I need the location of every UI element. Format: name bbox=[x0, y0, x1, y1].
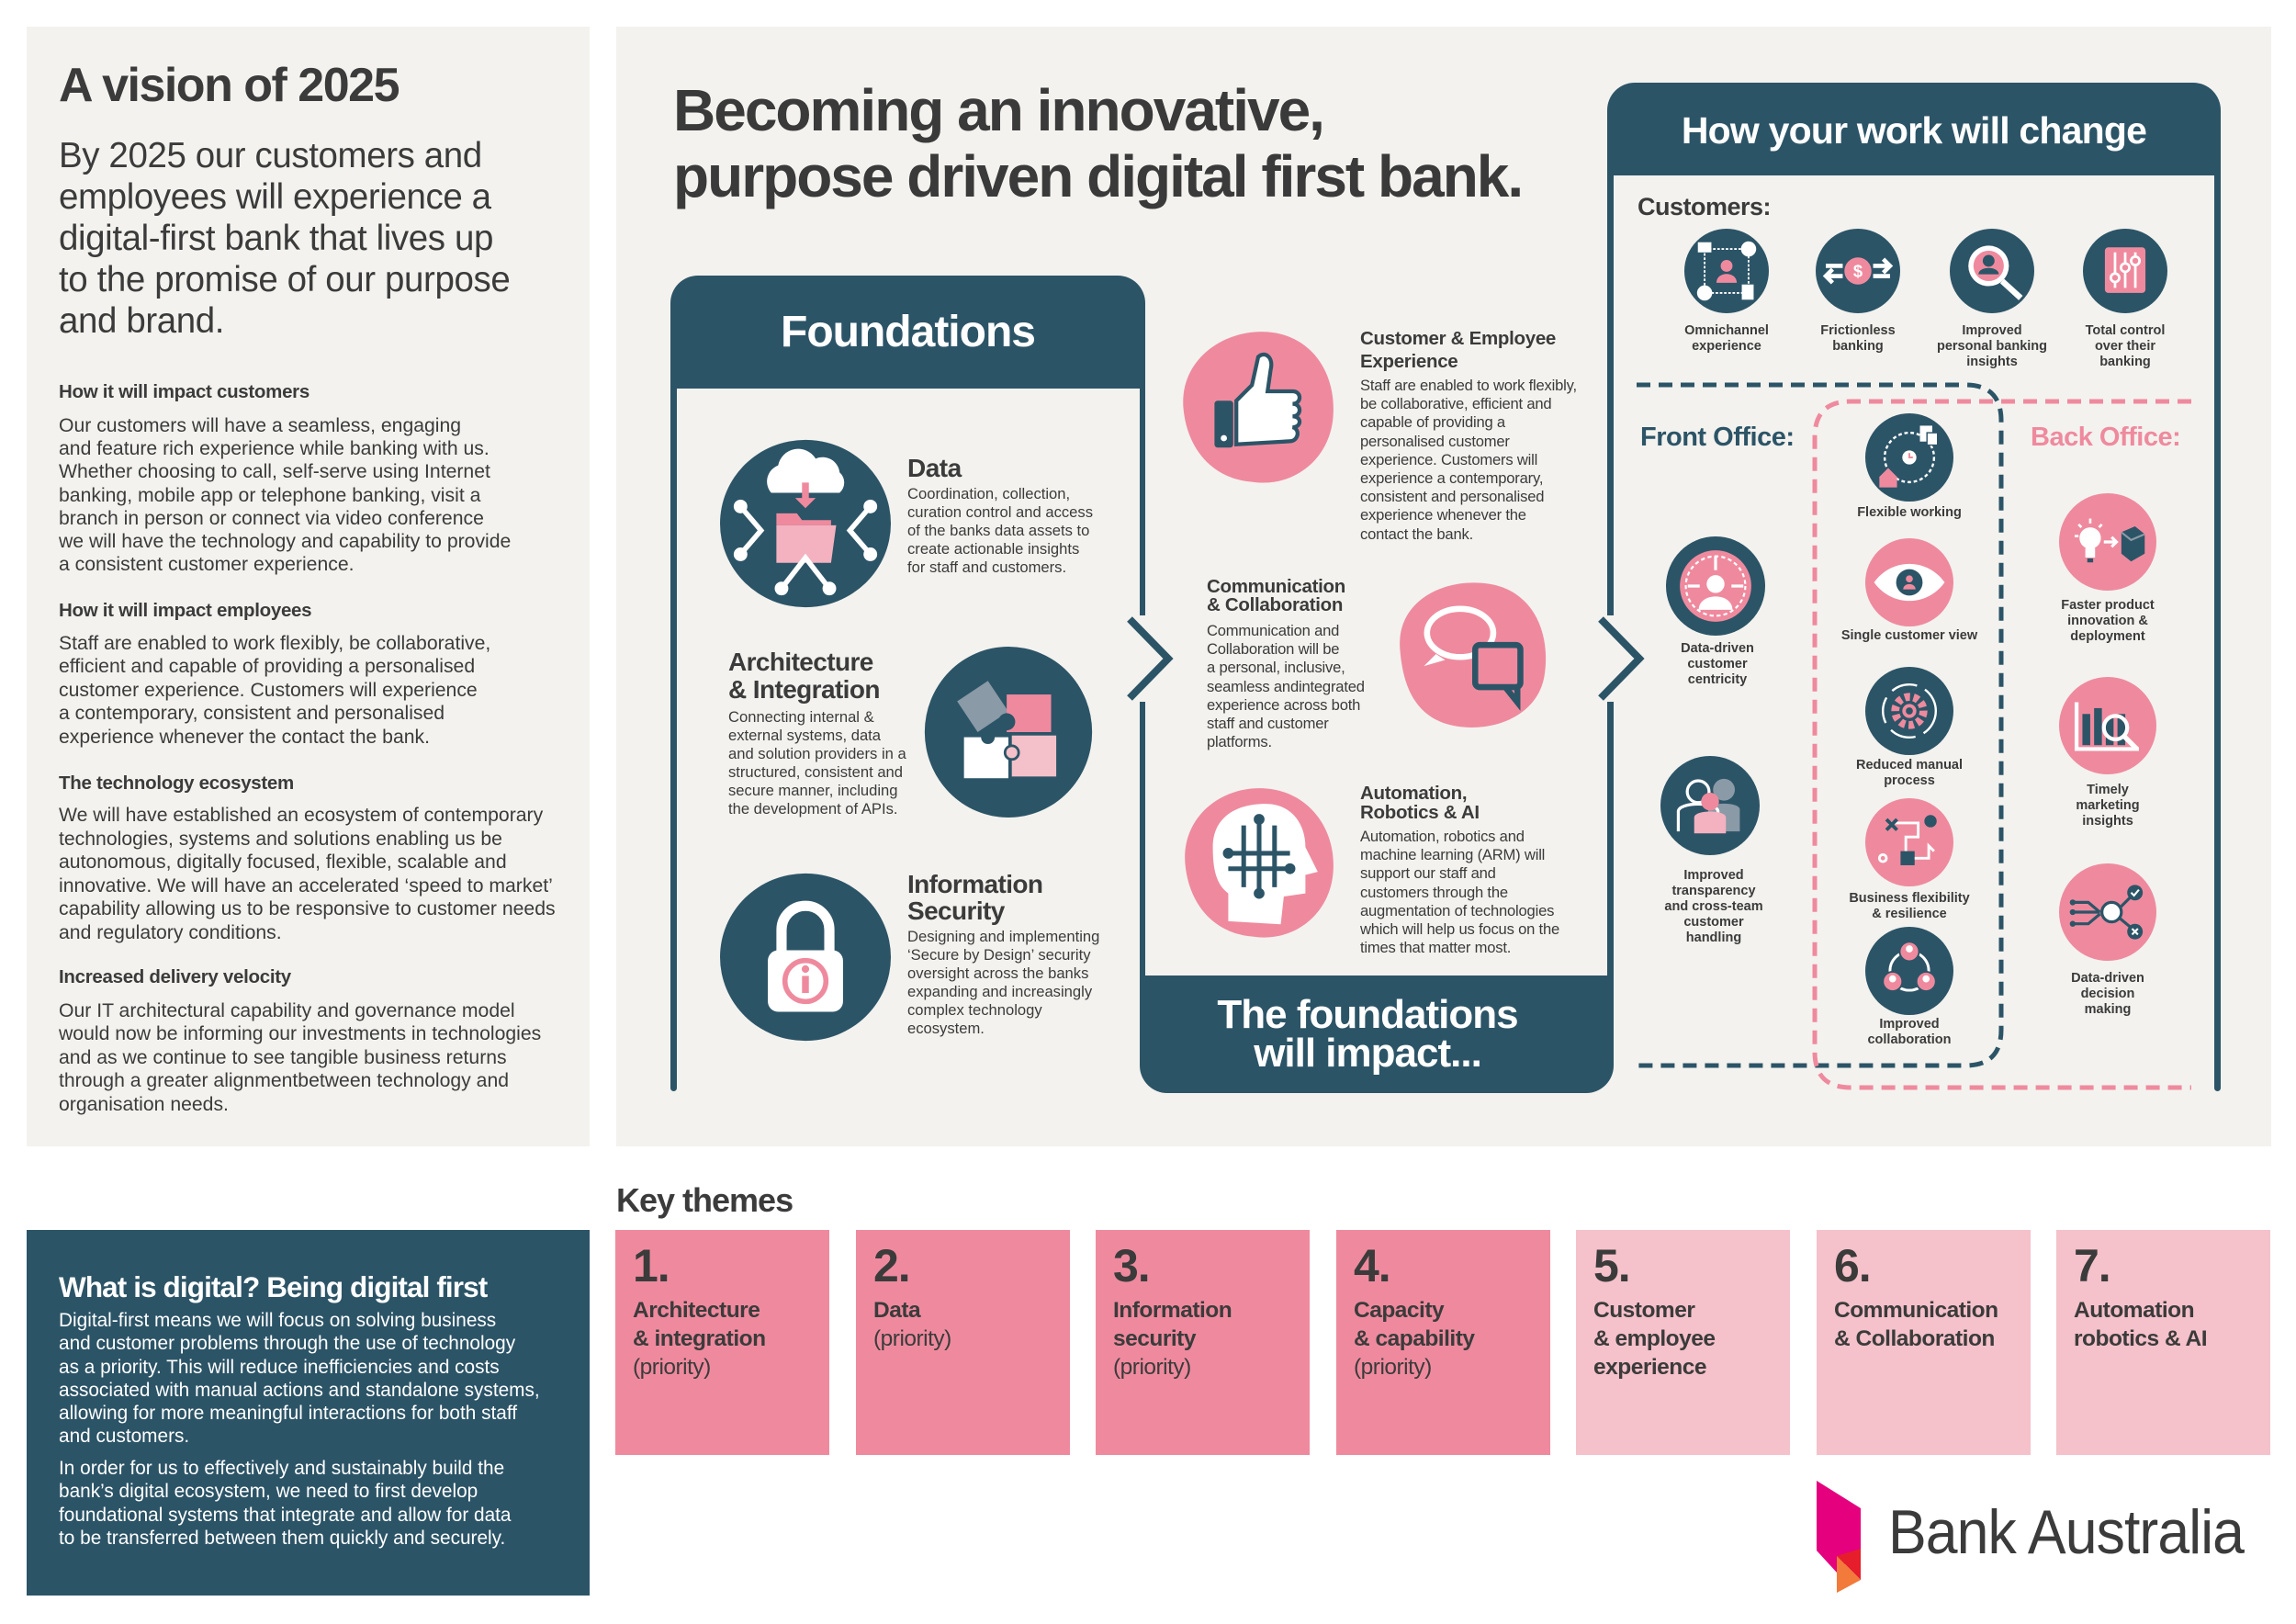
text: automation robotics & AI: augmentation of technologies bbox=[1360, 902, 1554, 919]
text: automation robotics & AI: Automation, robotics and bbox=[1360, 828, 1525, 845]
text: building ecosystem: foundational systems that integrate and allow for data bbox=[59, 1505, 511, 1526]
theme 5: & employee bbox=[1593, 1326, 1716, 1351]
heading: employees: How it will impact employees bbox=[59, 600, 311, 621]
label: improved personal banking insights bbox=[1937, 323, 2047, 369]
middle column right border bbox=[1607, 173, 1614, 977]
foundations header: Foundations bbox=[781, 308, 1035, 356]
text: delivery velocity: and as we continue to see tangible business returns bbox=[59, 1047, 507, 1068]
theme 3: security bbox=[1113, 1326, 1196, 1351]
text: customer & employee experience: contact the bank. bbox=[1360, 525, 1473, 543]
icon: AI head bbox=[1185, 788, 1334, 938]
theme 2 bbox=[856, 1230, 1070, 1455]
intro paragraph: to the promise of our purpose bbox=[59, 260, 510, 299]
text: customer & employee experience: experience whenever the bbox=[1360, 506, 1526, 524]
theme 7: robotics & AI bbox=[2074, 1326, 2207, 1351]
label: timely marketing insights: insights bbox=[2082, 814, 2133, 829]
theme 6 bbox=[1817, 1230, 2031, 1455]
label: frictionless banking: banking bbox=[1832, 339, 1884, 354]
theme 7 bbox=[2056, 1230, 2270, 1455]
label: improved transparency: handling bbox=[1686, 930, 1741, 945]
text: technology ecosystem: autonomous, digitally focused, flexible, scalable and bbox=[59, 851, 507, 873]
icon: speech bubbles bbox=[1400, 582, 1547, 727]
panel: vision of 2025 bbox=[27, 27, 590, 1146]
label: reduced manual process bbox=[1856, 758, 1963, 788]
label: reduced manual process: process bbox=[1884, 773, 1935, 788]
text: automation robotics & AI: Robotics & AI bbox=[1360, 802, 1480, 823]
icon: thumbs up bbox=[1183, 332, 1334, 483]
text: employees: efficient and capable of providing a personalised bbox=[59, 656, 475, 677]
text: technology ecosystem: technologies, systems and solutions enabling us be bbox=[59, 829, 502, 849]
text: architecture & integration: Architecture bbox=[728, 648, 873, 676]
text: technology ecosystem: We will have established an ecosystem of contemporary bbox=[59, 805, 543, 826]
theme 1 bbox=[615, 1230, 829, 1455]
text: automation robotics & AI: Automation, bbox=[1360, 783, 1467, 804]
text: architecture & integration: & Integration bbox=[728, 675, 880, 704]
theme 3: (priority) bbox=[1113, 1355, 1191, 1380]
theme 4: (priority) bbox=[1354, 1355, 1432, 1380]
label: data-driven customer centricity bbox=[1681, 641, 1754, 687]
text: customer & employee experience: consistent and personalised bbox=[1360, 488, 1544, 505]
text: automation robotics & AI: customers through the bbox=[1360, 884, 1508, 901]
label: total control over their banking: over their bbox=[2095, 339, 2155, 354]
text: customer & employee experience: experience a contemporary, bbox=[1360, 469, 1543, 487]
text: digital first explanation: and customer problems through the use of technology bbox=[59, 1333, 515, 1354]
text: architecture & integration bbox=[728, 648, 906, 818]
text: delivery velocity: through a greater alignmentbetween technology and bbox=[59, 1070, 509, 1091]
label: back office: Back Office: bbox=[2031, 423, 2180, 452]
text: building ecosystem: to be transferred between them quickly and securely. bbox=[59, 1528, 505, 1549]
text: technology ecosystem bbox=[59, 805, 556, 942]
icon: puzzle bbox=[924, 647, 1093, 818]
theme 1: Architecture bbox=[633, 1298, 760, 1323]
theme 2: (priority) bbox=[873, 1326, 951, 1351]
text: digital first explanation: as a priority. This will reduce inefficiencies and costs bbox=[59, 1357, 500, 1378]
text: data bbox=[907, 454, 1093, 576]
icon: frictionless banking bbox=[1816, 229, 1900, 313]
theme 5 bbox=[1576, 1230, 1790, 1455]
text: customers: Our customers will have a seamless, engaging bbox=[59, 415, 461, 436]
text: customers: Whether choosing to call, self-serve using Internet bbox=[59, 461, 490, 482]
text: automation robotics & AI: which will help us focus on the bbox=[1360, 920, 1559, 938]
text: delivery velocity: Our IT architectural capability and governance model bbox=[59, 1000, 515, 1021]
icon: data-driven decision making bbox=[2059, 863, 2156, 961]
icon: omnichannel bbox=[1684, 229, 1769, 313]
text: delivery velocity bbox=[59, 1000, 541, 1115]
text: customer & employee experience: personalised customer bbox=[1360, 433, 1510, 450]
label: improved collaboration: collaboration bbox=[1867, 1032, 1952, 1047]
label: customers: Customers: bbox=[1638, 193, 1771, 220]
theme 1: (priority) bbox=[633, 1355, 711, 1380]
label: faster product innovation: Faster product bbox=[2061, 598, 2155, 613]
logo: Bank Australia bbox=[1815, 1477, 2246, 1595]
text: information security: Designing and implementing bbox=[907, 928, 1099, 945]
label: timely marketing insights bbox=[2076, 783, 2140, 829]
callout: the foundations will impact bbox=[1140, 976, 1614, 1093]
text: information security bbox=[907, 870, 1099, 1037]
text: building ecosystem: In order for us to effectively and sustainably build the bbox=[59, 1458, 504, 1479]
intro paragraph: and brand. bbox=[59, 301, 224, 341]
label: improved transparency bbox=[1664, 868, 1763, 945]
main title bbox=[673, 77, 1522, 209]
text: employees: customer experience. Customers will experience bbox=[59, 680, 478, 701]
theme 3 bbox=[1096, 1230, 1310, 1455]
text: customers bbox=[59, 415, 511, 575]
theme 1: 1. bbox=[633, 1240, 670, 1291]
label: improved personal banking insights: personal banking bbox=[1937, 339, 2047, 354]
text: data: Data bbox=[907, 454, 962, 482]
icon: timely marketing insights bbox=[2059, 677, 2156, 774]
theme 4: & capability bbox=[1354, 1326, 1475, 1351]
text: customer & employee experience: Customer & Employee bbox=[1360, 328, 1556, 349]
text: data: Coordination, collection, bbox=[907, 485, 1070, 502]
text: customer & employee experience: Experience bbox=[1360, 351, 1458, 372]
label: timely marketing insights: Timely bbox=[2087, 783, 2129, 797]
label: faster product innovation bbox=[2061, 598, 2155, 645]
theme 5: 5. bbox=[1593, 1240, 1630, 1291]
panel: main diagram background bbox=[616, 27, 2271, 1146]
label: data-driven decision making: Data-driven bbox=[2071, 971, 2144, 986]
text: technology ecosystem: innovative. We will have an accelerated ‘speed to market’ bbox=[59, 874, 553, 897]
theme 3: 3. bbox=[1113, 1240, 1150, 1291]
theme 2: 2. bbox=[873, 1240, 910, 1291]
text: communication & collaboration bbox=[1207, 576, 1365, 750]
text: digital first explanation: associated with manual actions and standalone systems, bbox=[59, 1380, 540, 1401]
panel: what is digital bbox=[27, 1230, 590, 1596]
label: data-driven decision making bbox=[2071, 971, 2144, 1018]
text: technology ecosystem: capability allowing us to be responsive to customer needs bbox=[59, 898, 556, 919]
label: timely marketing insights: marketing bbox=[2076, 798, 2140, 813]
label: front office: Front Office: bbox=[1640, 423, 1795, 452]
text: delivery velocity: organisation needs. bbox=[59, 1094, 229, 1115]
text: data: of the banks data assets to bbox=[907, 522, 1089, 539]
callout: the foundations will impact: The foundations bbox=[1217, 992, 1518, 1037]
text: customer & employee experience bbox=[1360, 328, 1577, 543]
work change right border bbox=[2214, 173, 2221, 1091]
theme 2: Data bbox=[873, 1298, 920, 1323]
text: customers: banking, mobile app or telephone banking, visit a bbox=[59, 485, 480, 506]
text: information security: ‘Secure by Design’ security bbox=[907, 946, 1091, 964]
text: automation robotics & AI: times that matter most. bbox=[1360, 939, 1511, 956]
text: building ecosystem: bank’s digital ecosystem, we need to first develop bbox=[59, 1481, 478, 1502]
text: communication & collaboration: Collaboration will be bbox=[1207, 640, 1339, 658]
icon: data-driven customer centricity bbox=[1666, 536, 1765, 636]
label: business flexibility: Business flexibility bbox=[1849, 891, 1970, 906]
text: information security: expanding and increasingly bbox=[907, 983, 1092, 1000]
label: total control over their banking: Total control bbox=[2086, 323, 2165, 338]
label: single customer view: Single customer view bbox=[1841, 628, 1977, 643]
label: omnichannel experience: experience bbox=[1692, 339, 1761, 354]
text: digital first explanation: and customers. bbox=[59, 1426, 189, 1447]
label: data-driven customer centricity: Data-driven bbox=[1681, 641, 1754, 656]
theme 3: Information bbox=[1113, 1298, 1232, 1323]
label: flexible working: Flexible working bbox=[1857, 505, 1962, 520]
text: communication & collaboration: experience across both bbox=[1207, 696, 1360, 714]
label: improved collaboration bbox=[1867, 1017, 1952, 1048]
intro paragraph: By 2025 our customers and bbox=[59, 136, 482, 175]
label: faster product innovation: innovation & bbox=[2067, 614, 2148, 628]
text: architecture & integration: Connecting internal & bbox=[728, 708, 874, 726]
text: automation robotics & AI bbox=[1360, 783, 1559, 956]
text: digital first explanation: Digital-first means we will focus on solving business bbox=[59, 1310, 496, 1331]
label: business flexibility bbox=[1849, 891, 1970, 921]
label: data-driven customer centricity: customer bbox=[1687, 657, 1748, 671]
text: communication & collaboration: staff and customer bbox=[1207, 715, 1329, 732]
foundations header bbox=[670, 276, 1145, 389]
text: information security: Security bbox=[907, 897, 1005, 925]
text: information security: Information bbox=[907, 870, 1042, 898]
logo text: Bank Australia bbox=[1888, 1497, 2244, 1567]
theme 6: 6. bbox=[1834, 1240, 1871, 1291]
theme 4: Capacity bbox=[1354, 1298, 1444, 1323]
main title: purpose driven digital first bank. bbox=[673, 143, 1522, 209]
theme 7: Automation bbox=[2074, 1298, 2194, 1323]
label: improved transparency: and cross-team bbox=[1664, 899, 1763, 914]
arrow: chevron impacts to work change bbox=[1598, 615, 1644, 702]
text: information security: complex technology bbox=[907, 1001, 1042, 1019]
label: faster product innovation: deployment bbox=[2070, 629, 2145, 644]
text: customer & employee experience: experience. Customers will bbox=[1360, 451, 1537, 468]
label: improved transparency: Improved bbox=[1683, 868, 1744, 883]
heading: customers: How it will impact customers bbox=[59, 381, 310, 402]
foundations right border bbox=[1140, 386, 1145, 978]
text: employees: a contemporary, consistent and personalised bbox=[59, 703, 445, 724]
main title: Becoming an innovative, bbox=[673, 77, 1323, 143]
logo mark bbox=[1817, 1481, 1863, 1593]
heading: delivery velocity: Increased delivery velocity bbox=[59, 966, 291, 987]
heading: technology ecosystem: The technology ecosystem bbox=[59, 773, 294, 794]
label: data-driven decision making: decision bbox=[2081, 987, 2134, 1001]
text: digital first explanation bbox=[59, 1309, 540, 1449]
text: employees: Staff are enabled to work flexibly, be collaborative, bbox=[59, 633, 490, 654]
label: business flexibility: & resilience bbox=[1872, 907, 1947, 921]
text: automation robotics & AI: machine learning (ARM) will bbox=[1360, 846, 1545, 863]
intro paragraph bbox=[59, 136, 510, 341]
title: A vision of 2025: A vision of 2025 bbox=[59, 59, 399, 112]
theme 6: Communication bbox=[1834, 1298, 1998, 1323]
callout: the foundations will impact: will impact... bbox=[1254, 1031, 1481, 1076]
dashed office groupings bbox=[1637, 382, 2191, 1089]
intro paragraph: digital-first bank that lives up bbox=[59, 219, 493, 258]
label: total control over their banking bbox=[2085, 323, 2165, 369]
icon: personal banking insights bbox=[1950, 229, 2034, 313]
theme 7: 7. bbox=[2074, 1240, 2110, 1291]
label: improved collaboration: Improved bbox=[1879, 1017, 1940, 1032]
text: information security: ecosystem. bbox=[907, 1020, 985, 1037]
text: customer & employee experience: Staff are enabled to work flexibly, bbox=[1360, 377, 1577, 394]
label: reduced manual process: Reduced manual bbox=[1856, 758, 1963, 773]
icon: single customer view bbox=[1865, 538, 1953, 626]
theme 4: 4. bbox=[1354, 1240, 1390, 1291]
icon: improved transparency bbox=[1660, 756, 1760, 855]
heading: how your work will change: How your work will change bbox=[1682, 109, 2146, 152]
theme 6: & Collaboration bbox=[1834, 1326, 1995, 1351]
text: communication & collaboration: Communication bbox=[1207, 576, 1345, 597]
text: data: curation control and access bbox=[907, 503, 1093, 521]
text: data: create actionable insights bbox=[907, 540, 1079, 558]
heading: key themes: Key themes bbox=[616, 1181, 793, 1219]
text: communication & collaboration: a personal, inclusive, bbox=[1207, 659, 1345, 676]
text: customers: branch in person or connect via video conference bbox=[59, 508, 484, 529]
text: communication & collaboration: platforms. bbox=[1207, 733, 1272, 750]
label: total control over their banking: banking bbox=[2099, 355, 2151, 369]
theme 1: & integration bbox=[633, 1326, 766, 1351]
label: omnichannel experience: Omnichannel bbox=[1684, 323, 1769, 338]
theme 5: Customer bbox=[1593, 1298, 1694, 1323]
icon: improved collaboration bbox=[1865, 927, 1953, 1015]
text: employees: experience whenever the contact the bank. bbox=[59, 727, 430, 748]
text: employees bbox=[59, 633, 490, 748]
heading: how your work will change bbox=[1607, 83, 2221, 175]
text: customer & employee experience: be collaborative, efficient and bbox=[1360, 395, 1551, 412]
label: data-driven customer centricity: centricity bbox=[1688, 672, 1747, 687]
theme 5: experience bbox=[1593, 1355, 1706, 1380]
arrow: chevron foundations to impacts bbox=[1127, 615, 1174, 702]
icon: frictionless banking: $ bbox=[1853, 261, 1863, 280]
text: architecture & integration: external systems, data bbox=[728, 727, 881, 744]
icon: flexible working bbox=[1865, 413, 1953, 502]
text: data: for staff and customers. bbox=[907, 558, 1066, 576]
text: customers: and feature rich experience while banking with us. bbox=[59, 438, 490, 459]
text: technology ecosystem: and regulatory conditions. bbox=[59, 922, 282, 942]
text: communication & collaboration: Communication and bbox=[1207, 622, 1339, 639]
text: communication & collaboration: & Collaboration bbox=[1207, 594, 1343, 615]
theme 4 bbox=[1336, 1230, 1550, 1455]
foundations left border bbox=[670, 386, 677, 1091]
text: building ecosystem bbox=[59, 1457, 511, 1550]
label: improved personal banking insights: Improved bbox=[1962, 323, 2022, 338]
icon: faster product innovation bbox=[2059, 493, 2156, 591]
label: improved transparency: transparency bbox=[1671, 884, 1756, 898]
text: digital first explanation: allowing for more meaningful interactions for both staff bbox=[59, 1403, 517, 1424]
icon: information security bbox=[720, 873, 891, 1042]
label: data-driven decision making: making bbox=[2085, 1002, 2131, 1017]
text: architecture & integration: structured, consistent and bbox=[728, 763, 903, 781]
label: improved transparency: customer bbox=[1683, 915, 1744, 930]
text: customers: a consistent customer experience. bbox=[59, 554, 355, 575]
text: delivery velocity: would now be informing our investments in technologies bbox=[59, 1023, 541, 1044]
icon: data bbox=[720, 439, 891, 608]
text: communication & collaboration: seamless andintegrated bbox=[1207, 678, 1365, 695]
label: frictionless banking bbox=[1820, 323, 1896, 354]
text: architecture & integration: secure manner, including bbox=[728, 782, 897, 799]
text: architecture & integration: and solution providers in a bbox=[728, 745, 906, 762]
text: automation robotics & AI: support our staff and bbox=[1360, 864, 1496, 882]
icon: reduced manual process bbox=[1865, 667, 1953, 755]
text: information security: oversight across the banks bbox=[907, 964, 1088, 982]
icon: total control bbox=[2083, 229, 2167, 313]
label: improved personal banking insights: insights bbox=[1966, 355, 2018, 369]
label: omnichannel experience bbox=[1684, 323, 1769, 354]
text: customer & employee experience: capable of providing a bbox=[1360, 413, 1505, 431]
text: customers: we will have the technology and capability to provide bbox=[59, 531, 511, 552]
label: frictionless banking: Frictionless bbox=[1820, 323, 1896, 338]
heading: what is digital: What is digital? Being digital first bbox=[59, 1270, 487, 1303]
intro paragraph: employees will experience a bbox=[59, 177, 491, 217]
text: architecture & integration: the development of APIs. bbox=[728, 800, 898, 818]
icon: business flexibility bbox=[1865, 798, 1953, 886]
